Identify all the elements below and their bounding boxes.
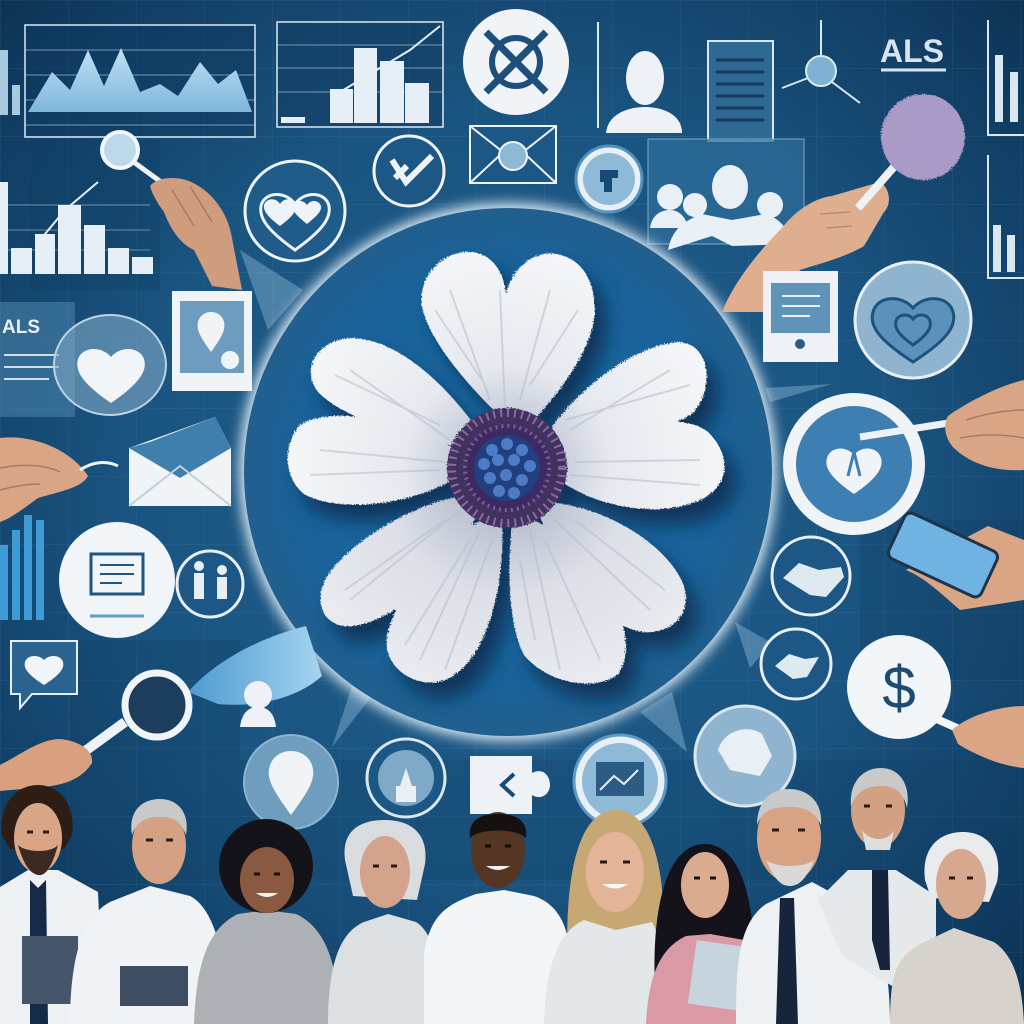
icon: person profile: [598, 22, 682, 133]
hand: top left: [150, 178, 242, 290]
person 4: [328, 820, 442, 1024]
hand: lower right: [952, 706, 1024, 768]
petal furrows: [310, 290, 700, 670]
icon: document: [708, 41, 773, 141]
icon: tablet card: [763, 271, 838, 362]
icon: tools circle: [374, 136, 444, 206]
person 10: [890, 832, 1024, 1024]
petal: lower left outer: [320, 496, 480, 626]
icon: crossed circle: [463, 9, 569, 115]
glow ring: [240, 204, 776, 740]
icon: heart speech bubble: [11, 641, 77, 708]
chart: far left top bars: [0, 50, 20, 115]
petal: left: [288, 416, 456, 505]
icon: small handshake circle: [761, 629, 831, 699]
icon: dollar speech bubble: $: [882, 654, 916, 721]
icon: people circle: [177, 551, 243, 617]
person 7: [646, 844, 772, 1024]
petal: lower right outer: [540, 502, 686, 632]
person 9: [818, 768, 936, 986]
icon: chart card badge: [574, 735, 666, 827]
icon: hearts circle: [245, 161, 345, 261]
people: [0, 768, 1024, 1024]
icon: pin card: [172, 291, 252, 391]
person 2: [70, 799, 232, 1024]
chart: top-left area chart: [25, 25, 255, 137]
hand: lower left: [0, 739, 92, 791]
icon: hand badge: [695, 706, 795, 806]
chart: right middle bars: [988, 155, 1024, 278]
icon: magnifier top left: [102, 132, 172, 190]
icon: person badge: [367, 739, 445, 817]
panel: ALS note left: [0, 302, 75, 417]
hand: right with pen: [860, 380, 1024, 470]
icon: monitor circle: [59, 522, 175, 638]
hand: left holding pin: [0, 437, 118, 522]
icon: puzzle circle: [576, 146, 642, 212]
hand: top right with brush: [722, 94, 965, 312]
chart: left vertical bars: [0, 515, 44, 620]
icon: phone in hand: [886, 511, 1024, 610]
chart: top right bars: [988, 20, 1024, 135]
icon: network node: [782, 20, 860, 103]
icon: envelope: [470, 126, 556, 183]
person 8: [736, 789, 890, 1024]
flower: [288, 252, 724, 684]
icon: heart ribbon badge: [783, 393, 925, 535]
icon: speech bubble with person: [188, 626, 322, 727]
person 1: [0, 785, 104, 1024]
flower center: [447, 408, 567, 528]
light rays around the disc: [240, 250, 832, 752]
icon: open envelope: [129, 417, 231, 506]
icon: location pin badge: [244, 735, 338, 829]
icon: dollar speech bubble: [847, 635, 995, 745]
petal: upper right: [546, 342, 707, 452]
person 5: [424, 812, 570, 1024]
icon: magnifier lower left: [70, 673, 189, 762]
petal: lower right inner: [509, 512, 626, 684]
person 6: [544, 810, 664, 1024]
panel: central circle: [244, 208, 772, 736]
icon: heart bubble: [54, 315, 166, 415]
icon: puzzle piece: [470, 756, 550, 814]
petal: right: [562, 421, 724, 509]
chart: top bar chart: [277, 22, 443, 127]
petal: lower left inner: [387, 514, 502, 682]
panel: community group: [648, 139, 804, 250]
panel: ALS note left: ALS: [2, 317, 40, 338]
petal: upper left: [311, 338, 478, 450]
petal: top: [422, 252, 595, 428]
person 3: [194, 819, 340, 1024]
icon: heart badge: [855, 262, 971, 378]
chart: left bars: [0, 182, 153, 274]
label: ALS top right: ALS: [880, 33, 944, 69]
icon: handshake circle: [772, 537, 850, 615]
